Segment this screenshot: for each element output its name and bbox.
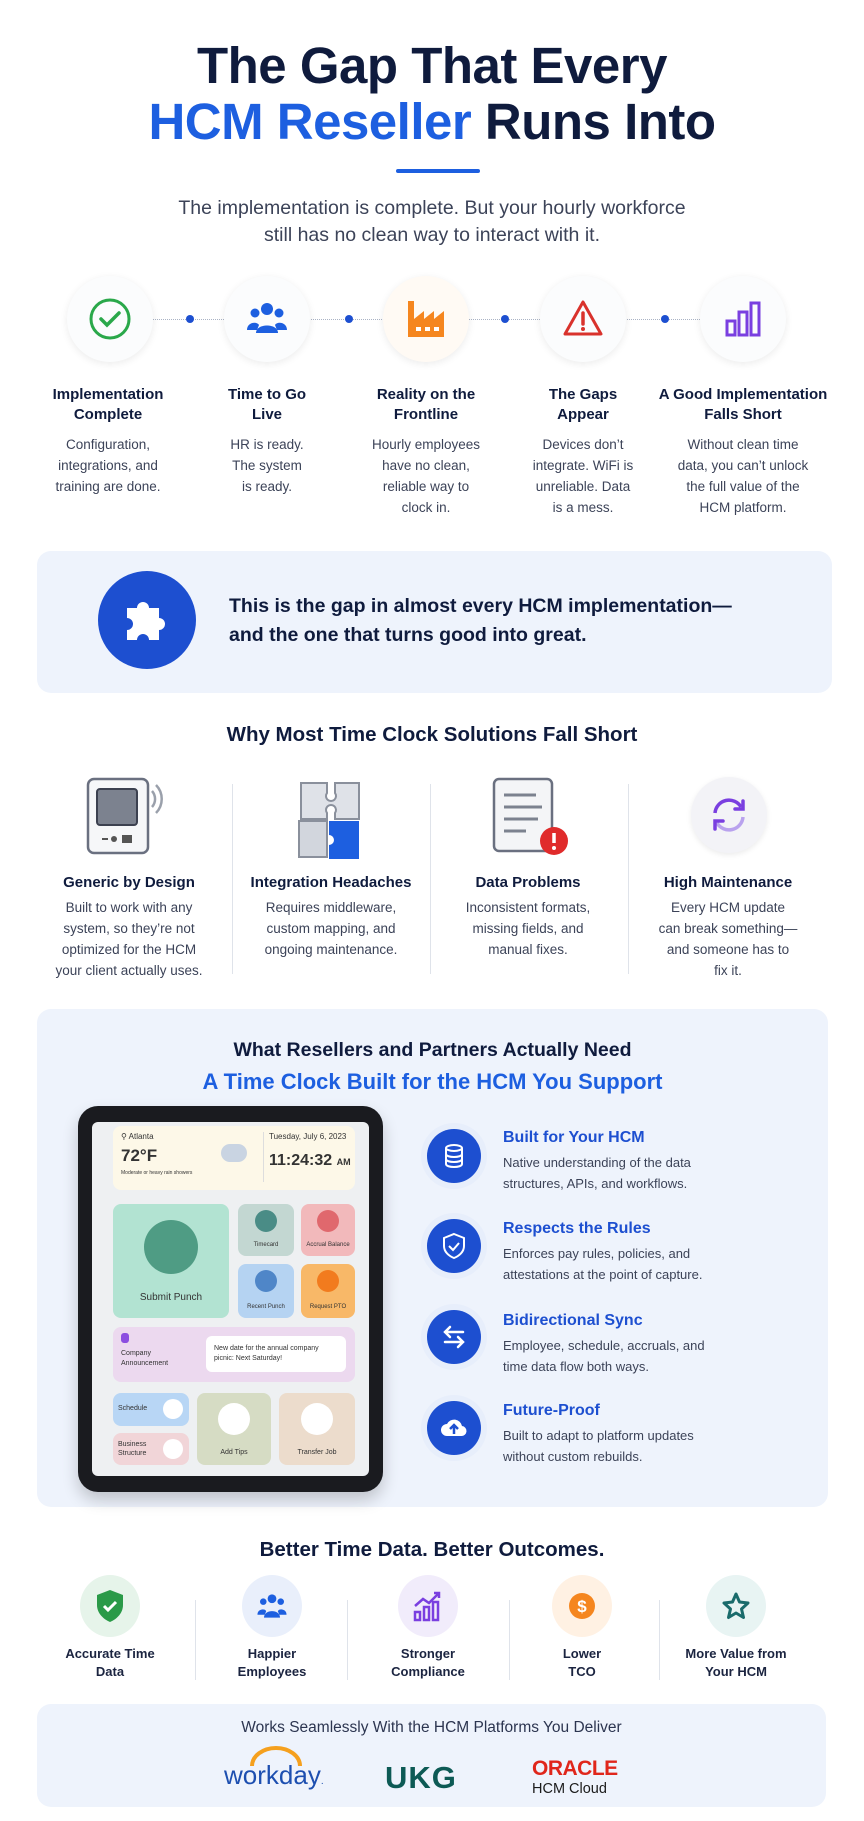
text: integrations, and (58, 458, 158, 473)
text: time data flow both ways. (503, 1359, 649, 1374)
title: The Gap That Every (197, 37, 667, 94)
text: Without clean time (687, 437, 799, 452)
step 3 text (372, 386, 480, 515)
icon: shield (421, 1213, 487, 1279)
tablet: announcement: Announcement (121, 1360, 168, 1367)
text: Employee, schedule, accruals, and (503, 1338, 705, 1353)
text: custom mapping, and (266, 921, 396, 936)
step 2 text (228, 386, 306, 494)
logo: Oracle HCM Cloud: HCM Cloud (532, 1781, 607, 1797)
tablet: announcement (113, 1327, 355, 1382)
subtitle: still has no clean way to interact with it. (264, 224, 600, 246)
text: Frontline (394, 406, 458, 423)
logo: workday: workday. (224, 1760, 324, 1790)
text: A Good Implementation (659, 386, 827, 403)
text: Appear (557, 406, 609, 423)
icon: arrows (421, 1304, 487, 1370)
text: Data Problems (475, 874, 581, 891)
feature: built for your HCM (427, 1129, 481, 1183)
text: Future-Proof (503, 1402, 600, 1419)
text: data, you can’t unlock (678, 458, 808, 473)
icon: puzzle pieces (298, 782, 360, 859)
callout text: and the one that turns good into great. (229, 624, 586, 646)
text: Request PTO (310, 1304, 346, 1310)
tablet: weather card: Tuesday, July 6, 2023 (269, 1132, 346, 1141)
outcome dividers (195, 1600, 196, 1680)
text: Complete (74, 406, 142, 423)
outcome: stronger compliance (391, 1575, 465, 1679)
panel: what resellers need (37, 1009, 828, 1507)
outcome: happier employees: Employees (238, 1664, 306, 1679)
logo: Oracle HCM Cloud: ORACLE (532, 1757, 618, 1780)
subtitle (178, 197, 686, 246)
text: training are done. (55, 479, 161, 494)
outcome: happier employees (238, 1575, 306, 1679)
icon: generic device (86, 778, 163, 854)
text: Built for Your HCM (503, 1129, 645, 1146)
text: Built to adapt to platform updates (503, 1428, 694, 1443)
text: Recent Punch (247, 1304, 285, 1310)
callout text: This is the gap in almost every HCM implementation— (229, 595, 732, 617)
panel: gap callout (37, 551, 832, 693)
text: Every HCM update (671, 900, 785, 915)
text: missing fields, and (472, 921, 584, 936)
logo: Oracle HCM Cloud (532, 1757, 618, 1797)
text: Structure (118, 1450, 146, 1457)
text: your client actually uses. (55, 963, 203, 978)
text: ongoing maintenance. (265, 942, 397, 957)
step 5 text (659, 386, 827, 515)
tablet: submit punch tile: Submit Punch (140, 1292, 202, 1303)
text: have no clean, (382, 458, 470, 473)
tablet: announcement: Company (121, 1350, 151, 1357)
panel heading (202, 1039, 662, 1094)
text: Built to work with any (66, 900, 192, 915)
text: Devices don’t (542, 437, 624, 452)
icon: database (421, 1123, 487, 1189)
text: Hourly employees (372, 437, 480, 452)
text: Configuration, (66, 437, 150, 452)
outcome: lower TCO: Lower (563, 1646, 601, 1661)
text: optimized for the HCM (62, 942, 196, 957)
text: Native understanding of the data (503, 1155, 691, 1170)
text: The system (232, 458, 302, 473)
tablet: bottom tiles (113, 1393, 355, 1465)
text: The Gaps (549, 386, 617, 403)
text: is ready. (242, 479, 292, 494)
tablet: weather card: 72°F (121, 1146, 157, 1165)
title: HCM Reseller Runs Into (148, 93, 716, 150)
text: Falls Short (704, 406, 782, 423)
dividers (232, 784, 233, 974)
outcome: lower TCO: TCO (568, 1664, 596, 1679)
step 4 icon: warning (540, 276, 626, 362)
panel: HCM platforms (37, 1704, 826, 1807)
text: the full value of the (686, 479, 800, 494)
text: can break something— (659, 921, 797, 936)
feature: respects the rules (427, 1219, 481, 1273)
outcome: more value: More Value from (685, 1646, 787, 1661)
step 1 text (53, 386, 163, 494)
text: unreliable. Data (536, 479, 630, 494)
text: Add Tips (220, 1449, 248, 1456)
panel heading: A Time Clock Built for the HCM You Support (202, 1069, 662, 1094)
icon: cloud upload (421, 1395, 487, 1461)
text: Timecard (254, 1242, 278, 1248)
panel heading: What Resellers and Partners Actually Need (233, 1039, 632, 1061)
outcome: lower TCO (552, 1575, 612, 1679)
tablet: announcement: New date for the annual company picnic: Next Saturday! (214, 1345, 319, 1362)
timeline dots (186, 315, 669, 323)
title (148, 37, 716, 150)
text: Accrual Balance (306, 1242, 350, 1248)
text: Respects the Rules (503, 1220, 651, 1237)
text: and someone has to (667, 942, 789, 957)
icon: document with error (492, 778, 568, 855)
text: Generic by Design (63, 874, 195, 891)
outcome: stronger compliance: Stronger (401, 1646, 455, 1661)
text: attestations at the point of capture. (503, 1267, 702, 1282)
column 3 text (466, 874, 590, 957)
text: Transfer Job (297, 1449, 337, 1456)
tablet: small tiles (238, 1204, 355, 1318)
text: fix it. (714, 963, 742, 978)
text: Bidirectional Sync (503, 1312, 643, 1329)
text: without custom rebuilds. (503, 1449, 642, 1464)
platforms heading: Works Seamlessly With the HCM Platforms You Deliver (241, 1719, 622, 1736)
heading: better outcomes: Better Time Data. Better Outcomes. (260, 1538, 604, 1561)
text: HCM platform. (699, 500, 786, 515)
text: reliable way to (383, 479, 469, 494)
outcome: lower TCO: $ (577, 1597, 587, 1616)
outcome: stronger compliance: Compliance (391, 1664, 465, 1679)
tablet: weather card: 11:24:32 AM (269, 1152, 351, 1169)
step 4 text (533, 386, 633, 515)
text: Implementation (53, 386, 163, 403)
text: HR is ready. (230, 437, 304, 452)
icon: sync circle (691, 777, 767, 853)
text: Live (252, 406, 282, 423)
text: Time to Go (228, 386, 306, 403)
text: Integration Headaches (251, 874, 411, 891)
feature: future-proof (427, 1401, 481, 1455)
callout text (229, 595, 732, 646)
tablet: weather card: ⚲ Atlanta (121, 1132, 154, 1141)
text: Reality on the (377, 386, 475, 403)
outcome: accurate time data: Data (96, 1664, 124, 1679)
text: Schedule (118, 1405, 147, 1412)
text: system, so they’re not (63, 921, 195, 936)
text: integrate. WiFi is (533, 458, 633, 473)
text: Business (118, 1441, 146, 1448)
text: Requires middleware, (266, 900, 396, 915)
step 3 icon: factory (383, 276, 469, 362)
feature: bidirectional sync (427, 1310, 481, 1364)
tablet: weather card: Moderate or heavy rain showers (121, 1170, 192, 1176)
outcome: happier employees: Happier (248, 1646, 296, 1661)
text: Enforces pay rules, policies, and (503, 1246, 690, 1261)
logo: UKG: UKG (385, 1760, 457, 1795)
step 1 icon: check (67, 276, 153, 362)
outcome: accurate time data (65, 1575, 155, 1679)
tablet: weather card (113, 1126, 355, 1190)
column 4 text (659, 874, 798, 978)
tablet mockup (78, 1106, 383, 1492)
text: is a mess. (553, 500, 613, 515)
step 5 icon: bar chart (700, 276, 786, 362)
tablet: submit punch tile (113, 1204, 229, 1318)
text: manual fixes. (488, 942, 568, 957)
title underline (396, 169, 480, 173)
logo: workday (224, 1746, 324, 1790)
outcome: accurate time data: Accurate Time (65, 1646, 155, 1661)
outcome: more value: Your HCM (705, 1664, 767, 1679)
text: Inconsistent formats, (466, 900, 590, 915)
text: clock in. (402, 500, 450, 515)
step 2 icon: people (224, 276, 310, 362)
icon: puzzle (98, 571, 196, 669)
column 2 text (251, 874, 411, 957)
text: High Maintenance (664, 874, 792, 891)
subtitle: The implementation is complete. But your hourly workforce (178, 197, 686, 219)
outcome: more value (685, 1575, 787, 1679)
heading: why solutions fall short: Why Most Time Clock Solutions Fall Short (227, 723, 637, 746)
column 1 text (55, 874, 203, 978)
timeline connector (150, 319, 710, 320)
text: structures, APIs, and workflows. (503, 1176, 687, 1191)
